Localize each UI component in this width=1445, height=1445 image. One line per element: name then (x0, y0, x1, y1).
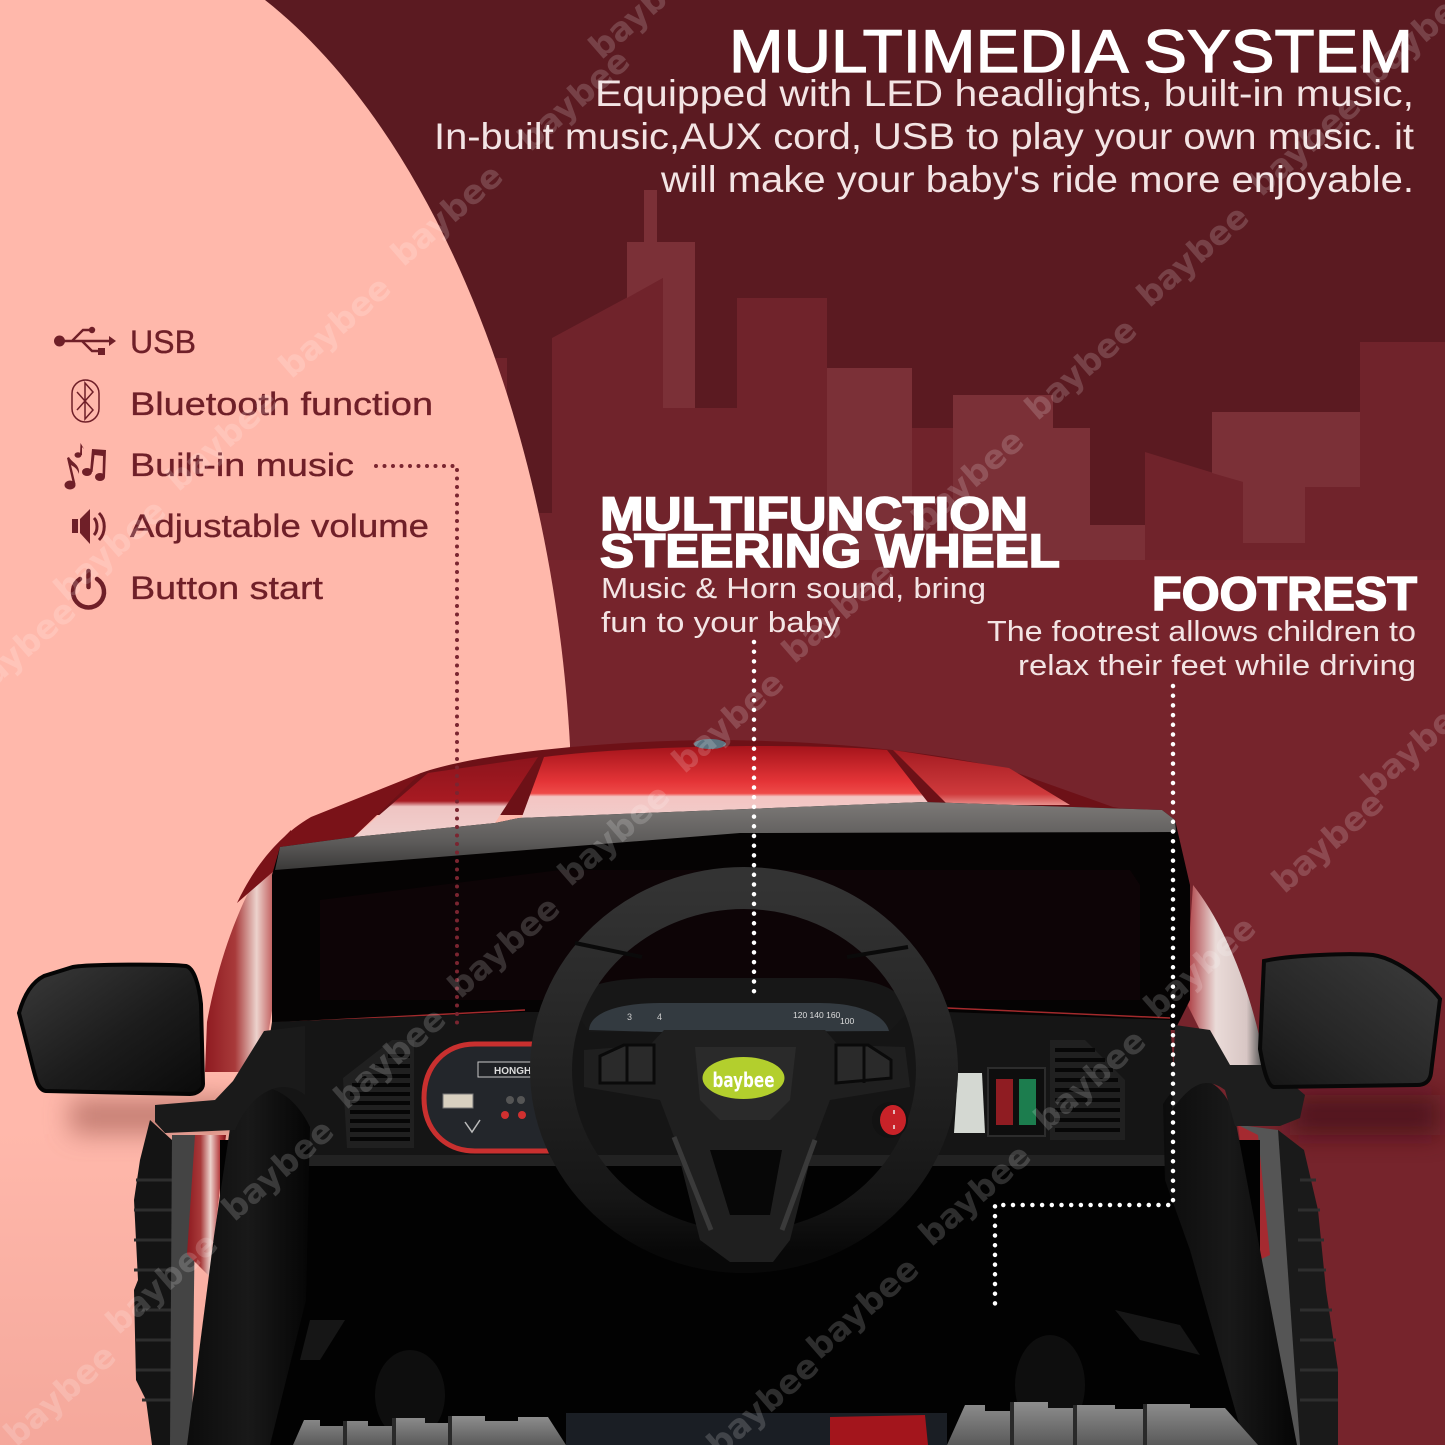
label: bluetooth: Bluetooth function (130, 386, 433, 422)
baybee watermarks: baybee (1129, 197, 1256, 315)
baybee watermarks: baybee (510, 41, 637, 159)
hood (237, 739, 1162, 903)
right mirror arm (1172, 1025, 1305, 1126)
pink lower background tone (0, 1130, 570, 1445)
map screen (954, 1073, 985, 1133)
title: multimedia system: MULTIMEDIA SYSTEM (729, 18, 1413, 85)
power rocker knob (872, 1102, 908, 1138)
tires (134, 1120, 1338, 1445)
icon: power (73, 571, 104, 607)
right mirror (1260, 954, 1440, 1087)
baybee watermarks: baybee (664, 663, 791, 781)
right air vent (1050, 1040, 1125, 1140)
baybee badge: baybee (712, 1068, 774, 1092)
label: adjustable volume: Adjustable volume (130, 508, 429, 544)
baybee watermarks: baybee (1241, 86, 1368, 204)
dotted leader: steering wheel (752, 642, 756, 995)
icon: usb (54, 327, 116, 355)
upper body right (1185, 885, 1262, 1080)
ride-on car (19, 739, 1440, 1445)
wheel hub and spokes (584, 1030, 910, 1262)
label: usb: USB (130, 324, 196, 360)
left air vent (343, 1040, 414, 1148)
baybee watermarks: baybee (440, 888, 567, 1006)
baybee watermarks: baybee (904, 421, 1031, 539)
callout: footrest: The footrest allows children to (987, 616, 1416, 648)
instrument cluster: 100 (840, 1016, 854, 1026)
label: button start: Button start (130, 570, 323, 606)
baybee watermarks: baybee (1017, 310, 1144, 428)
steering buttons (600, 1045, 891, 1083)
right pillar (1163, 1079, 1297, 1445)
baybee watermarks: baybee (1136, 908, 1263, 1026)
intro paragraph (434, 73, 1415, 200)
left mirror shadow (70, 1098, 240, 1134)
callout: multifunction steering wheel (600, 487, 1060, 639)
baybee watermarks: baybee (383, 156, 510, 274)
baybee watermarks: baybee (1264, 783, 1391, 901)
upper body left (205, 830, 291, 1072)
baybee watermarks: baybee (98, 1224, 225, 1342)
icon: speaker (72, 509, 104, 544)
icon: music notes (64, 443, 106, 490)
callout: multifunction steering wheel: fun to your baby (601, 607, 841, 639)
intro paragraph: will make your baby's ride more enjoyable. (660, 159, 1414, 200)
callout: multifunction steering wheel: MULTIFUNCTION (600, 487, 1028, 540)
baybee watermarks: baybee (158, 381, 285, 499)
right mirror shadow (1290, 1095, 1440, 1135)
callout: footrest: relax their feet while driving (1018, 650, 1416, 682)
left mirror arm (155, 1026, 305, 1133)
baybee watermarks: baybee (911, 1136, 1038, 1254)
instrument cluster: 120 140 160 (793, 1010, 841, 1020)
instrument cluster: 3 (627, 1012, 632, 1022)
baybee badge (702, 1057, 784, 1099)
dotted leader: footrest (995, 686, 1173, 1308)
windshield visor (272, 802, 1190, 1030)
cabin interior (220, 1140, 1260, 1445)
baybee watermarks: baybee (271, 268, 398, 386)
lower body sides (170, 1125, 1300, 1445)
callout: multifunction steering wheel: Music & Horn sound, bring (601, 573, 986, 605)
rear tail and footrests (293, 1402, 1258, 1445)
callout: footrest (987, 567, 1417, 682)
baybee watermarks: baybee (774, 553, 901, 671)
instrument cluster (570, 978, 910, 1032)
instrument cluster: 4 (657, 1012, 662, 1022)
baybee watermarks: baybee (550, 776, 677, 894)
left mirror (19, 965, 203, 1094)
wheel rim (551, 888, 937, 1252)
dashboard (250, 1012, 1180, 1166)
label: built-in music: Built-in music (130, 447, 354, 483)
feature list (54, 324, 433, 607)
icon: bluetooth (72, 380, 99, 422)
seat shapes (300, 1310, 1200, 1440)
intro paragraph: Equipped with LED headlights, built-in music, (595, 73, 1414, 114)
callout: multifunction steering wheel: STEERING WHEEL (600, 524, 1060, 577)
callout: footrest: FOOTREST (1152, 567, 1417, 620)
baybee watermarks: baybee (799, 1249, 926, 1367)
baybee watermarks: baybee (214, 1111, 341, 1229)
intro paragraph: In-built music,AUX cord, USB to play your own music. it (434, 116, 1415, 157)
baybee watermarks: baybee (46, 491, 173, 609)
baybee watermarks: baybee (326, 999, 453, 1117)
music player panel (424, 1044, 550, 1151)
music player panel: HONGHUI (494, 1066, 541, 1077)
pink curved panel (0, 0, 570, 1445)
gear switches (988, 1068, 1045, 1136)
baybee watermarks: baybee (1026, 1021, 1153, 1139)
steering wheel (551, 888, 937, 1262)
dotted leader: built-in music (376, 466, 457, 1026)
left pillar (187, 1087, 310, 1445)
